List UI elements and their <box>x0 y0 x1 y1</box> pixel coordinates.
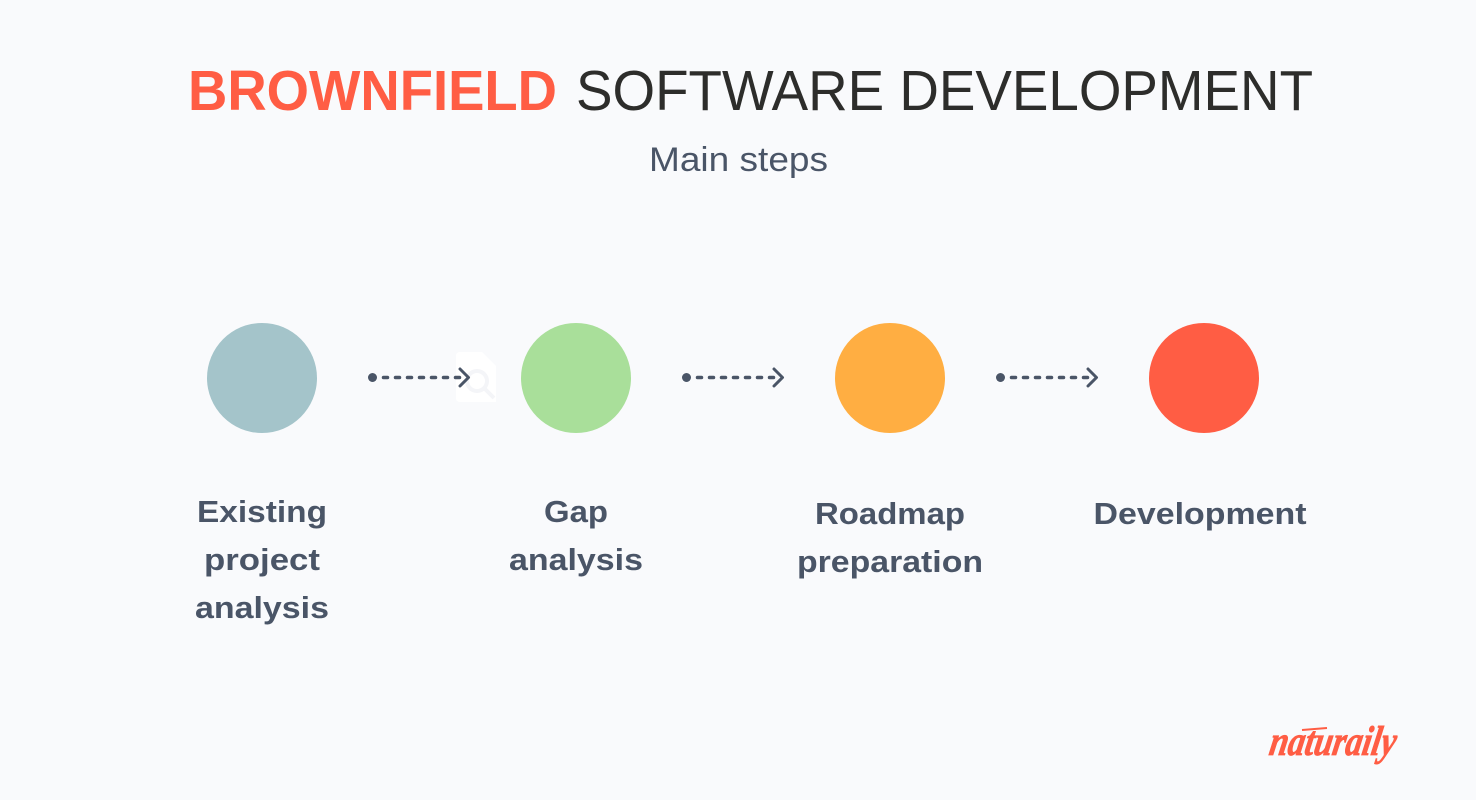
step 4 circle <box>1149 323 1259 433</box>
title <box>188 59 1313 123</box>
step 2 label <box>509 494 643 577</box>
step 4: development <box>1094 323 1306 531</box>
step 3 label: preparation <box>797 544 983 579</box>
arrow 3 <box>996 369 1096 386</box>
step 3: roadmap preparation <box>797 323 983 579</box>
icon: faint document with magnifier <box>456 352 496 402</box>
title: BROWNFIELD <box>188 59 557 123</box>
step 2 circle <box>521 323 631 433</box>
arrow 1 <box>368 369 468 386</box>
step 4 label: Development <box>1094 496 1306 531</box>
step 3 label <box>797 496 983 579</box>
step 1 label: Existing <box>197 494 327 529</box>
step 2 label: Gap <box>544 494 608 529</box>
step 2: gap analysis <box>509 323 643 577</box>
step 1 label: analysis <box>195 590 329 625</box>
step 1 circle <box>207 323 317 433</box>
step 1: existing project analysis <box>195 323 329 625</box>
step 3 circle <box>835 323 945 433</box>
step 1 label <box>195 494 329 625</box>
step 1 label: project <box>204 542 320 577</box>
title: SOFTWARE DEVELOPMENT <box>576 59 1313 123</box>
logo: naturaily: naturaily <box>1266 718 1401 765</box>
step 3 label: Roadmap <box>815 496 965 531</box>
subtitle: Main steps <box>649 141 828 179</box>
step 2 label: analysis <box>509 542 643 577</box>
arrow 2 <box>682 369 782 386</box>
